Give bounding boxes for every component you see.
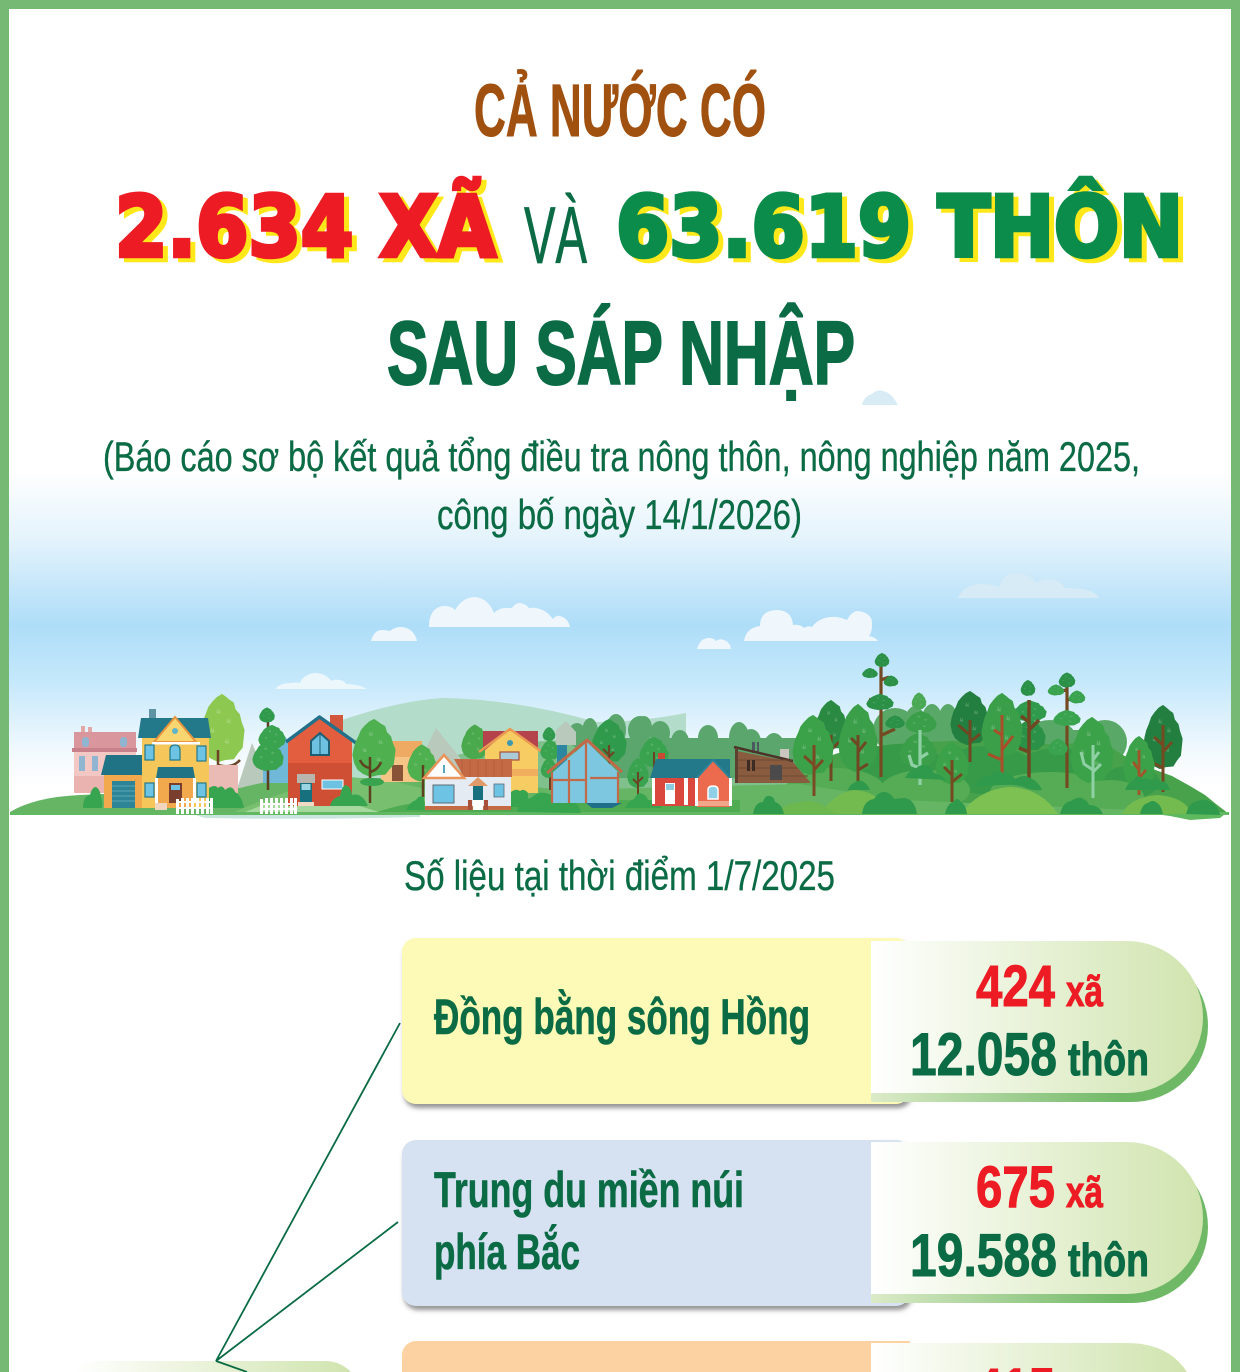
title line 3: SAU SÁP NHẬP <box>387 302 855 404</box>
tree 11: pale trunk <box>1071 718 1113 798</box>
region label card: Trung du miền núi <box>434 1162 744 1218</box>
title <box>115 69 1183 404</box>
value pill: 675 <box>976 1155 1055 1220</box>
value pill: xã <box>1066 1168 1103 1217</box>
house: yellow with red roof <box>479 729 542 793</box>
tree: dark behind glass house <box>592 720 626 768</box>
cloud: left large <box>429 597 570 627</box>
clouds <box>275 390 1099 689</box>
house: blue background <box>263 729 290 783</box>
tree 10: tall pine <box>1048 673 1085 788</box>
tree: behind yellow-red house <box>462 725 488 759</box>
tree: small by white house <box>408 745 436 797</box>
region label card <box>402 938 910 1104</box>
house: pink background <box>72 726 137 793</box>
connector lines <box>216 1023 400 1372</box>
headline number: villages: 63.619 THÔN <box>616 178 1183 276</box>
bushes: yellow house <box>83 786 244 808</box>
house: red <box>286 715 356 806</box>
ground <box>10 776 1229 820</box>
bottom-left source box <box>73 1361 351 1372</box>
tree 13: dark <box>1144 706 1182 792</box>
value pill: 19.588 <box>910 1222 1057 1289</box>
data date: Số liệu tại thời điểm 1/7/2025 <box>404 852 835 899</box>
cloud: right small <box>697 638 731 649</box>
tree: small near red cottage <box>628 759 648 797</box>
headline number: communes: 2.634 XÃ <box>115 178 496 276</box>
pink annex <box>209 765 238 793</box>
value pill: 424 <box>976 954 1055 1019</box>
value pill <box>871 1343 1187 1372</box>
fence: left <box>176 798 213 814</box>
tree 1 <box>793 716 833 796</box>
forest trees <box>793 653 1182 802</box>
subtitle: công bố ngày 14/1/2026) <box>437 491 802 538</box>
tree 2 <box>815 701 847 781</box>
panel: third region, cut off at page bottom <box>402 1341 1187 1372</box>
tree 6 <box>936 743 968 802</box>
tree: round by red house <box>353 720 395 803</box>
forest back mass <box>780 704 1229 814</box>
value pill: xã <box>1066 967 1103 1016</box>
subtitle <box>103 433 1140 538</box>
sky gradient <box>9 470 1231 815</box>
cloud: top small <box>862 390 898 405</box>
title line 1: CẢ NƯỚC CÓ <box>474 69 766 152</box>
bush: glass house <box>625 793 662 808</box>
house: glass <box>547 740 622 808</box>
panel: Trung du miền núi phía Bắc <box>402 1140 1208 1306</box>
illustration: landscape <box>10 653 1229 820</box>
cloud: right large <box>744 610 878 641</box>
tree 7: dark <box>951 692 989 762</box>
value pill <box>871 1142 1208 1303</box>
value pill <box>871 941 1208 1102</box>
barn <box>734 742 810 783</box>
value pill: thôn <box>1068 1033 1149 1085</box>
house: red cottage <box>650 753 732 807</box>
cloud: low pale <box>275 673 367 689</box>
house: yellow <box>101 709 211 810</box>
region card <box>402 1341 910 1372</box>
value pill: 12.058 <box>910 1021 1057 1088</box>
tree: pine by glass house <box>541 727 559 790</box>
tree: light green behind yellow house <box>200 695 244 793</box>
tree: left of cottage <box>640 738 668 775</box>
background hills <box>336 698 800 790</box>
house: white <box>424 755 512 810</box>
region label card: phía Bắc <box>434 1224 580 1280</box>
bush: red house <box>330 785 368 806</box>
fence: center <box>260 798 297 814</box>
tree 9: right of center <box>1014 680 1046 780</box>
region label card: Đồng bằng sông Hồng <box>434 989 810 1045</box>
value pill: thôn <box>1068 1234 1149 1286</box>
cloud: left small <box>371 627 417 641</box>
forest mounds and bushes <box>753 765 1220 815</box>
tree 3 <box>839 705 877 784</box>
connector word: VÀ <box>524 191 587 281</box>
bushes: white house <box>406 790 581 813</box>
tree 4: tall pine <box>862 653 904 777</box>
cloud: top right pale <box>958 573 1099 598</box>
tree 8 <box>982 694 1022 778</box>
gray mountains <box>236 721 576 792</box>
tree 12 <box>1124 737 1154 795</box>
panel: Đồng bằng sông Hồng <box>402 938 1208 1104</box>
house: orange background <box>381 741 422 782</box>
region label card <box>402 1140 910 1306</box>
tree 5: pale trunk <box>900 693 936 785</box>
back treeline <box>568 714 805 778</box>
tree: pine beside red house <box>253 708 285 790</box>
